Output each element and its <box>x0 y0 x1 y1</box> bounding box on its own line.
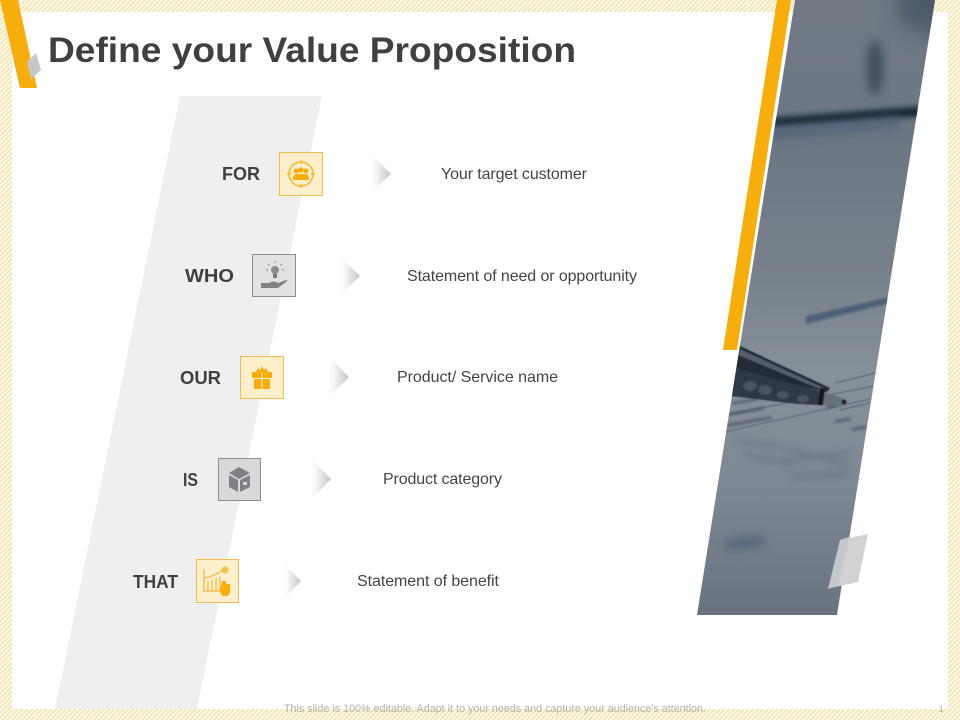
text: need: Statement of need or opportunity <box>407 268 637 285</box>
label: IS: IS <box>183 470 198 490</box>
row: OUR <box>180 356 558 398</box>
text: target customer: Your target customer <box>441 166 588 183</box>
icon: target audience <box>280 152 322 196</box>
row: THAT <box>133 560 500 602</box>
arrow <box>339 256 360 296</box>
title: Define your Value Proposition <box>48 31 576 70</box>
grey photo tab <box>828 534 868 589</box>
grey slanted background band <box>55 96 322 709</box>
label: THAT: THAT <box>133 572 178 592</box>
arrow <box>283 563 301 600</box>
icon: gift box <box>240 356 284 398</box>
text: benefit: Statement of benefit <box>357 573 500 590</box>
icon: idea in hand <box>252 254 296 296</box>
arrow <box>310 458 331 501</box>
label: WHO: WHO <box>185 266 234 286</box>
text: category: Product category <box>383 471 502 488</box>
arrow <box>370 153 391 194</box>
footer note: This slide is 100% editable. Adapt it to your needs and capture your audience's attention. <box>284 703 706 715</box>
page number: 1 <box>939 705 944 714</box>
orange slanted bar right <box>723 0 791 350</box>
grey corner tab <box>27 53 41 79</box>
icon: package <box>218 458 260 500</box>
orange corner accent <box>0 0 37 88</box>
pen <box>730 346 846 405</box>
row: WHO <box>185 254 637 296</box>
photo panel: pen on financial table <box>697 0 935 615</box>
text: product name: Product/ Service name <box>397 369 558 386</box>
row: FOR <box>222 152 588 196</box>
icon: growth chart and hand <box>196 560 238 602</box>
label: FOR: FOR <box>222 164 260 184</box>
label: OUR: OUR <box>180 368 221 388</box>
row: IS <box>183 458 502 501</box>
arrow <box>328 356 349 398</box>
